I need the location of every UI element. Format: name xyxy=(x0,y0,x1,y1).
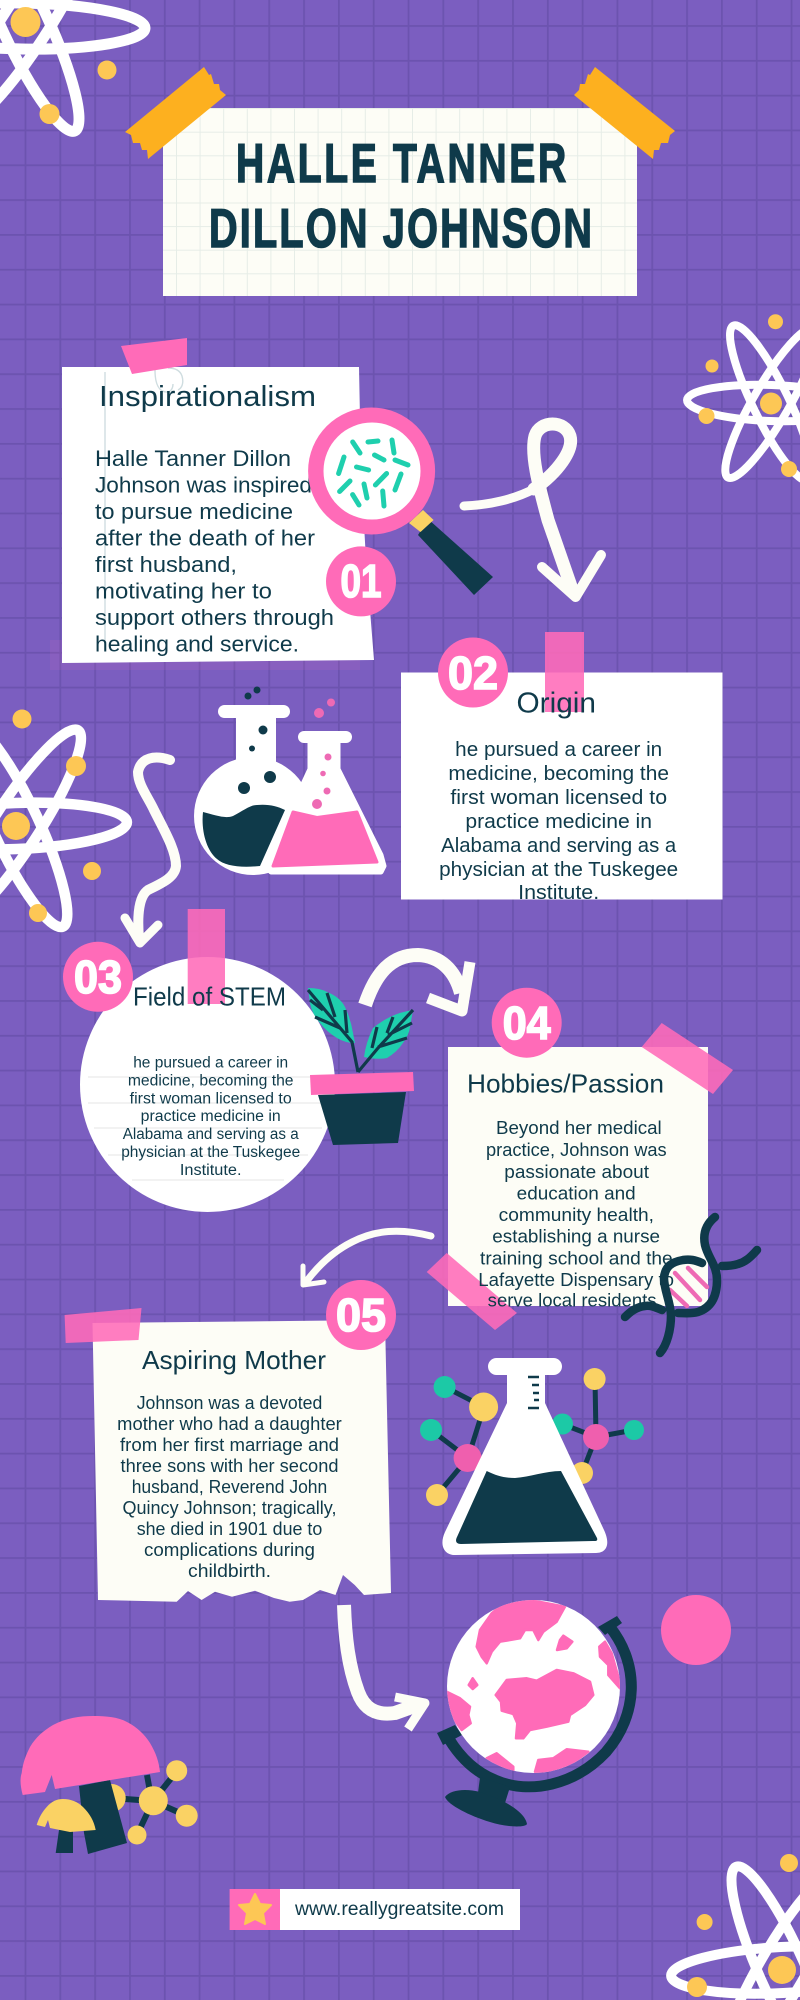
text: Inspirationalism body: to pursue medicine xyxy=(95,499,293,524)
text: Inspirationalism body: healing and service. xyxy=(95,632,299,656)
text: Origin body: he pursued a career in xyxy=(455,739,662,761)
text: Aspiring Mother body: childbirth. xyxy=(188,1561,271,1581)
text: Field of STEM body: physician at the Tuskegee xyxy=(121,1144,300,1161)
text: Inspirationalism body: after the death of her xyxy=(95,526,316,550)
icon: atom bottom right xyxy=(670,1854,800,2000)
footer: website xyxy=(230,1889,520,1930)
badge: 03 xyxy=(63,942,133,1012)
tape: Hobbies bottom left xyxy=(427,1253,517,1330)
text: Aspiring Mother body: mother who had a daughter xyxy=(117,1414,342,1434)
text: Hobbies body: training school and the xyxy=(480,1247,673,1268)
text: Hobbies body: serve local residents. xyxy=(488,1290,662,1311)
badge: 02 xyxy=(438,638,508,708)
text: Field of STEM body: he pursued a career in xyxy=(133,1054,288,1072)
text: Hobbies body: practice, Johnson was xyxy=(486,1139,667,1160)
text: website url: www.reallygreatsite.com xyxy=(294,1899,504,1920)
title: DILLON JOHNSON xyxy=(209,199,592,260)
text: Hobbies body: education and xyxy=(517,1182,636,1203)
panel: title card xyxy=(125,67,675,296)
arrow: loop arrow to Origin xyxy=(464,424,601,597)
badge: 05: 05 xyxy=(336,1289,386,1341)
heading: Aspiring Mother: Aspiring Mother xyxy=(142,1345,326,1375)
icon: magnifying glass xyxy=(308,408,493,595)
text: Hobbies body: Lafayette Dispensary to xyxy=(478,1269,674,1290)
title: HALLE TANNER xyxy=(236,134,566,195)
text: Inspirationalism body: Halle Tanner Dillon xyxy=(95,446,291,471)
text: Field of STEM body: Institute. xyxy=(180,1162,242,1179)
text: Aspiring Mother body: Johnson was a devoted xyxy=(137,1393,322,1413)
badge: 01: 01 xyxy=(340,555,382,607)
text: Origin body: Alabama and serving as a xyxy=(441,835,677,857)
icon: chemistry flasks xyxy=(194,686,384,875)
badge: 05 xyxy=(326,1280,396,1350)
tape: Origin xyxy=(545,632,584,712)
heading: Field of STEM: Field of STEM xyxy=(133,982,286,1012)
panel: Inspirationalism xyxy=(50,338,374,670)
text: Origin body: first woman licensed to xyxy=(450,787,667,809)
arrow: arrow to globe xyxy=(344,1605,425,1729)
text: Aspiring Mother body: three sons with her second xyxy=(120,1456,338,1476)
tape: title right xyxy=(574,67,675,159)
icon: DNA strand xyxy=(625,1217,757,1353)
tape: title left xyxy=(125,67,226,159)
text: Aspiring Mother body: from her first marriage and xyxy=(120,1435,339,1455)
text: Aspiring Mother body: Quincy Johnson; tragically, xyxy=(122,1498,336,1518)
text: Hobbies body xyxy=(478,1117,674,1311)
text: Field of STEM body xyxy=(121,1054,300,1179)
heading: Inspirationalism: Inspirationalism xyxy=(99,381,316,413)
text: Aspiring Mother body: husband, Reverend John xyxy=(132,1477,327,1497)
arrow: curved arrow to Hobbies xyxy=(365,955,470,1011)
text: Aspiring Mother body: she died in 1901 due to xyxy=(137,1519,322,1539)
text: Inspirationalism body: motivating her to xyxy=(95,578,272,604)
text: Origin body: Institute. xyxy=(518,882,599,904)
text: Inspirationalism body: Johnson was inspired xyxy=(95,472,312,498)
text: Inspirationalism body xyxy=(95,446,334,656)
text: Hobbies body: Beyond her medical xyxy=(496,1117,662,1138)
badge: 01 xyxy=(326,546,396,616)
heading: Origin: Origin xyxy=(516,688,596,720)
text: Aspiring Mother body xyxy=(117,1393,342,1581)
text: Hobbies body: establishing a nurse xyxy=(492,1225,660,1246)
icon: potted plant xyxy=(308,988,414,1145)
icon: globe xyxy=(437,1600,631,1826)
badge: 04: 04 xyxy=(503,997,551,1049)
icon: star xyxy=(239,1894,271,1924)
text: Field of STEM body: Alabama and serving as a xyxy=(123,1126,299,1143)
text: Hobbies body: community health, xyxy=(499,1204,654,1225)
icon: atom top left xyxy=(0,0,145,141)
text: Aspiring Mother body: complications during xyxy=(144,1540,315,1560)
icon: atom upper right xyxy=(686,314,800,488)
heading: Hobbies/Passion: Hobbies/Passion xyxy=(467,1069,664,1099)
title xyxy=(209,134,592,260)
text: Inspirationalism body: support others through xyxy=(95,605,334,630)
tape: Aspiring Mother xyxy=(65,1308,142,1343)
tape: Field of STEM xyxy=(188,909,225,1004)
icon: flask with molecules xyxy=(420,1358,644,1555)
badge: 03: 03 xyxy=(74,951,122,1003)
text: Origin body: physician at the Tuskegee xyxy=(439,859,678,881)
text: Field of STEM body: first woman licensed to xyxy=(130,1090,292,1107)
tape: Inspirationalism xyxy=(121,338,187,374)
arrow: curved arrow to Aspiring Mother xyxy=(303,1231,431,1285)
text: Origin body: practice medicine in xyxy=(465,811,652,833)
badge: 02: 02 xyxy=(448,647,498,699)
panel: Origin xyxy=(401,632,722,904)
icon: pink circle xyxy=(661,1595,731,1665)
text: Field of STEM body: practice medicine in xyxy=(141,1108,281,1125)
text: Origin body xyxy=(439,739,678,904)
arrow: squiggle to Field of STEM xyxy=(125,758,176,943)
tape: Hobbies top right xyxy=(642,1023,733,1094)
panel: Hobbies/Passion xyxy=(427,1023,733,1330)
panel: Field of STEM xyxy=(80,909,335,1212)
text: Inspirationalism body: first husband, xyxy=(95,552,237,577)
text: Field of STEM body: medicine, becoming the xyxy=(128,1072,294,1089)
text: Origin body: medicine, becoming the xyxy=(448,763,669,785)
icon: atom middle left xyxy=(0,710,128,936)
panel: Aspiring Mother xyxy=(65,1308,391,1602)
icon: mushrooms and molecule xyxy=(21,1716,198,1854)
badge: 04 xyxy=(492,988,562,1058)
text: Hobbies body: passionate about xyxy=(504,1161,649,1182)
